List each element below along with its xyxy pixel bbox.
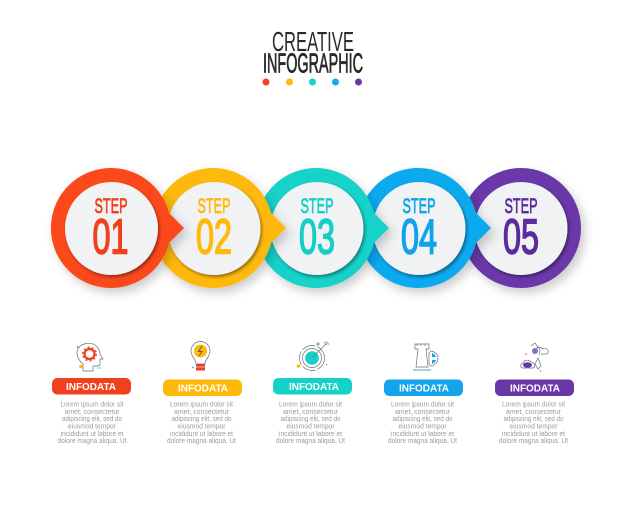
icon: target with arrow <box>297 342 329 370</box>
title colour dots <box>262 78 362 86</box>
body text 2: incididunt ut labore et <box>170 429 233 438</box>
body text 1: eiusmod tempor <box>68 422 117 430</box>
body text 4: adipiscing elit, sed do <box>392 414 452 423</box>
body text 5 <box>499 400 568 445</box>
body text 5: amet, consectetur <box>506 407 562 416</box>
step 05: 05 <box>503 210 539 264</box>
step 01: 01 <box>92 210 128 264</box>
label pill 2: INFODATA <box>178 382 228 394</box>
body text 1: dolore magna aliqua. Ut <box>58 436 126 445</box>
body text 2: eiusmod tempor <box>178 422 226 430</box>
label pill 4: INFODATA <box>399 382 449 394</box>
body text 5: dolore magna aliqua. Ut <box>499 436 568 445</box>
step 03: 03 <box>299 210 335 264</box>
body text 3: amet, consectetur <box>283 407 339 416</box>
body text 4: dolore magna aliqua. Ut <box>388 436 457 445</box>
icon: head with gear <box>76 343 103 371</box>
label pill 5: INFODATA <box>510 382 560 394</box>
label pill 3: INFODATA <box>289 381 339 393</box>
icon: rook and shield <box>413 344 438 370</box>
body text 3: incididunt ut labore et <box>279 429 342 438</box>
panel: info 1 <box>52 378 131 445</box>
label pill 1: INFODATA <box>66 381 116 393</box>
body text 2: dolore magna aliqua. Ut <box>167 436 236 445</box>
step 04: STEP <box>402 195 436 218</box>
body text 3 <box>276 400 345 445</box>
icon: light bulb <box>191 342 210 370</box>
step 05 <box>461 168 581 288</box>
body text 4: eiusmod tempor <box>398 422 447 430</box>
step 02 <box>153 168 286 288</box>
step 03: STEP <box>300 195 334 218</box>
body text 5: Lorem ipsum dolor sit <box>502 400 565 408</box>
step 03 <box>256 168 389 288</box>
panel: info 5 <box>495 380 574 445</box>
step 01: STEP <box>94 195 128 218</box>
body text 4: amet, consectetur <box>395 407 451 416</box>
title: INFOGRAPHIC <box>263 48 363 78</box>
body text 2 <box>167 400 236 445</box>
panel: info 4 <box>384 380 463 445</box>
panel: info 2 <box>163 380 242 445</box>
body text 3: eiusmod tempor <box>286 422 335 430</box>
body text 4: incididunt ut labore et <box>391 429 454 438</box>
body text 3: dolore magna aliqua. Ut <box>276 436 345 445</box>
body text 1: adipiscing elit, sed do <box>62 414 122 423</box>
body text 2: amet, consectetur <box>174 407 230 416</box>
body text 2: adipiscing elit, sed do <box>172 414 232 423</box>
body text 3: Lorem ipsum dolor sit <box>279 400 342 408</box>
body text 1: amet, consectetur <box>64 407 120 416</box>
body text 1: Lorem ipsum dolor sit <box>60 400 124 408</box>
title: CREATIVE <box>272 26 354 57</box>
icon: cloud and rocket <box>521 343 548 372</box>
step 02: STEP <box>198 195 230 218</box>
body text 4 <box>388 400 457 445</box>
body text 3: adipiscing elit, sed do <box>280 414 340 423</box>
body text 1 <box>58 400 126 445</box>
body text 5: adipiscing elit, sed do <box>504 414 564 423</box>
title <box>263 26 363 78</box>
step 02: 02 <box>196 210 232 264</box>
step 04: 04 <box>401 210 437 264</box>
step 04 <box>358 168 491 288</box>
body text 5: eiusmod tempor <box>510 422 558 430</box>
body text 5: incididunt ut labore et <box>502 429 565 438</box>
step 05: STEP <box>504 195 538 218</box>
body text 1: incididunt ut labore et <box>60 429 124 438</box>
body text 4: Lorem ipsum dolor sit <box>391 400 454 408</box>
step 01 <box>51 168 184 288</box>
body text 2: Lorem ipsum dolor sit <box>170 400 233 408</box>
panel: info 3 <box>273 378 352 445</box>
